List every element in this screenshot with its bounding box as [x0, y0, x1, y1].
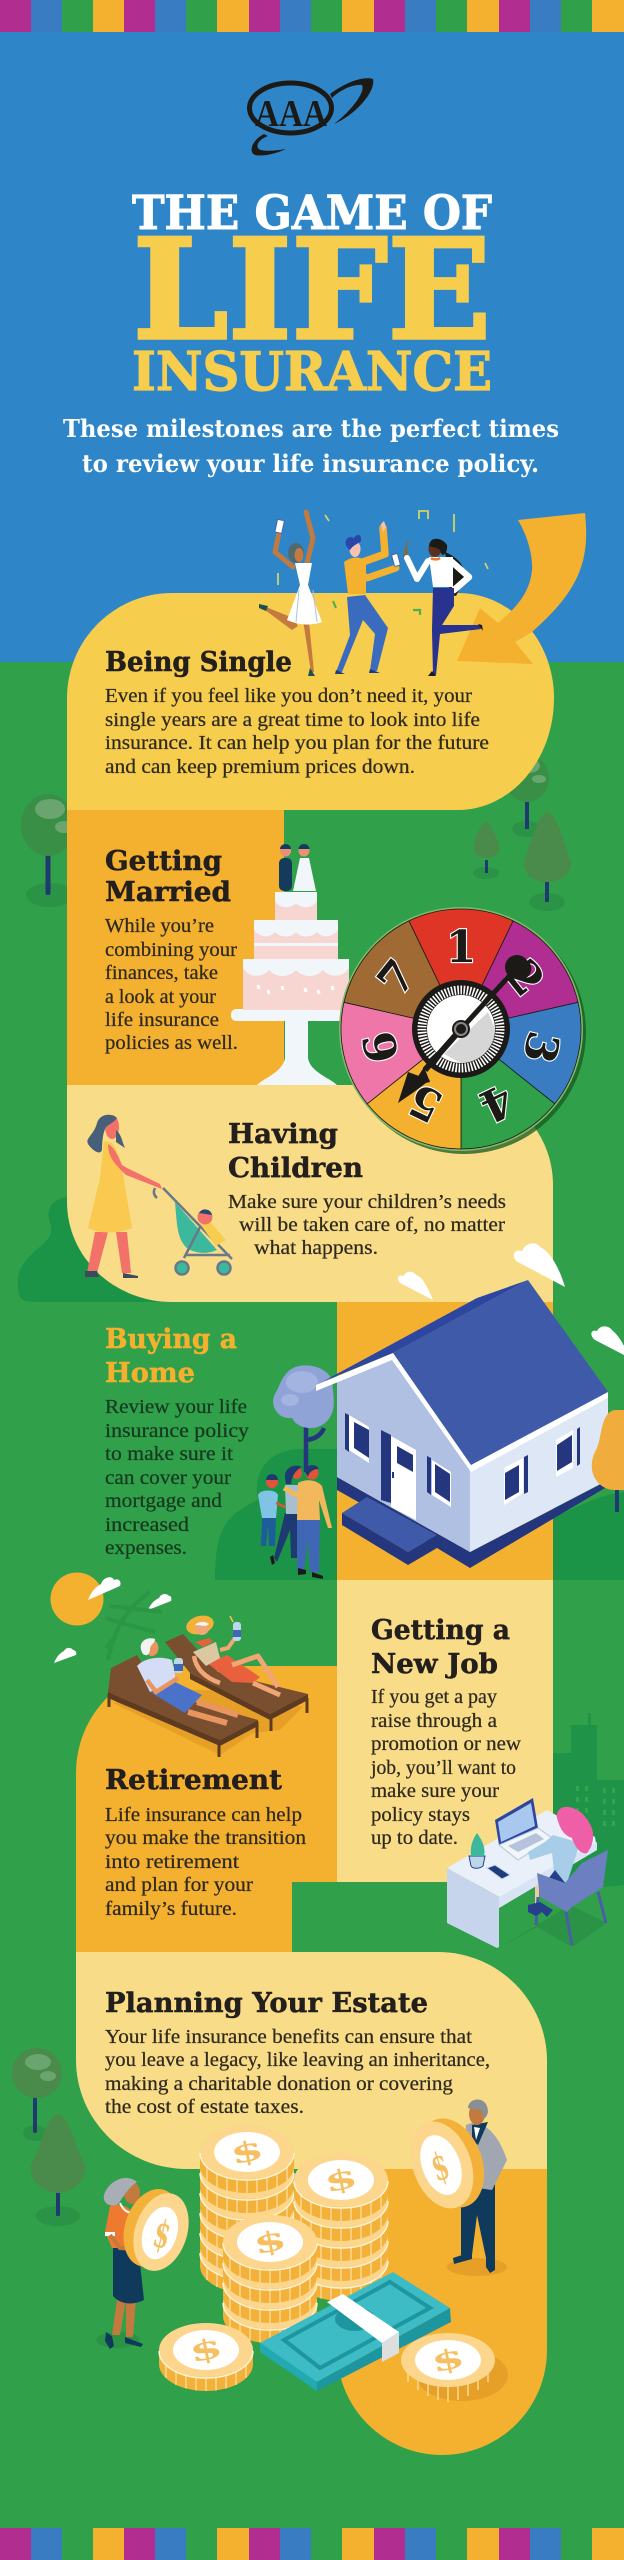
text: planning your estate: Your life insurance benefits can ensure that	[105, 2026, 472, 2048]
illustration: woman at desk	[447, 1798, 608, 1948]
illustration: city skyline	[553, 1713, 624, 1887]
illustration: spinner wheel: 6	[353, 1027, 410, 1068]
text: getting a new job: policy stays	[371, 1804, 470, 1826]
text: having children: Having	[228, 1118, 338, 1150]
illustration: loose coins	[159, 2323, 508, 2402]
text: getting married: finances, take	[105, 962, 218, 984]
illustration: coin stacks: $	[322, 2162, 361, 2199]
text: retirement: Life insurance can help	[105, 1804, 302, 1826]
text: buying a home: increased	[105, 1514, 189, 1536]
text: being single: insurance. It can help you plan for the future	[105, 732, 489, 754]
illustration: sun and clouds	[50, 1572, 171, 1663]
illustration: man holding coin: $	[426, 2144, 455, 2191]
buying a home hills and panel	[215, 1302, 624, 1580]
text: retirement: Retirement	[105, 1764, 282, 1796]
text: retirement: into retirement	[105, 1851, 239, 1873]
text: getting married: Getting	[105, 845, 222, 877]
text: being single: Being Single	[105, 646, 292, 678]
estate trees	[12, 2048, 85, 2226]
text: buying a home: can cover your	[105, 1467, 231, 1489]
text: buying a home: mortgage and	[105, 1490, 222, 1512]
panel: having children	[18, 1085, 553, 1302]
illustration: spinner wheel: 4	[471, 1073, 521, 1132]
panel: planning your estate	[76, 1952, 547, 2455]
text: getting a new job: New Job	[371, 1648, 498, 1680]
panel: retirement	[76, 1666, 337, 1952]
text: buying a home: Review your life	[105, 1396, 247, 1418]
text: buying a home	[105, 1323, 249, 1559]
text: getting married	[105, 845, 238, 1054]
text: getting married: life insurance	[105, 1009, 219, 1031]
title: LIFE	[133, 208, 491, 371]
text: being single: Even if you feel like you don’t need it, your	[105, 685, 472, 707]
text: retirement: family’s future.	[105, 1898, 237, 1920]
text: getting married: While you’re	[105, 915, 214, 937]
AAA logo: AAA	[255, 93, 327, 135]
text: planning your estate: the cost of estate taxes.	[105, 2096, 304, 2118]
text: getting a new job: promotion or new	[371, 1733, 522, 1755]
text: getting a new job: make sure your	[371, 1780, 499, 1802]
text: buying a home: Buying a	[105, 1323, 237, 1355]
AAA logo	[250, 78, 373, 156]
panel: being single	[67, 593, 554, 810]
text: having children	[228, 1118, 506, 1259]
illustration: loose coins: $	[429, 2342, 468, 2379]
text: having children: will be taken care of, no matter	[239, 1214, 505, 1236]
text: getting married: policies as well.	[105, 1032, 238, 1054]
text: buying a home: to make sure it	[105, 1443, 233, 1465]
clouds near house	[398, 1243, 624, 1355]
text: having children: Children	[228, 1152, 363, 1184]
text: getting married: a look at your	[105, 986, 216, 1008]
text: buying a home: expenses.	[105, 1537, 187, 1559]
illustration: spinner wheel: 2	[495, 950, 554, 1006]
illustration: loose coins: $	[187, 2332, 226, 2369]
illustration: coin stacks: $	[251, 2224, 290, 2261]
text: being single: and can keep premium prices down.	[105, 756, 415, 778]
subtitle: These milestones are the perfect times	[63, 414, 559, 443]
text: planning your estate	[105, 1987, 490, 2118]
text: getting a new job: job, you’ll want to	[370, 1757, 516, 1779]
illustration: sun loungers with couple	[108, 1613, 308, 1757]
text: buying a home: insurance policy	[105, 1420, 249, 1442]
text: getting a new job: raise through a	[371, 1710, 497, 1732]
illustration: woman holding coin	[96, 2178, 198, 2349]
text: getting a new job: If you get a pay	[371, 1686, 497, 1708]
illustration: coin stacks: $	[228, 2134, 267, 2171]
back lounger	[165, 1634, 308, 1714]
text: having children: Make sure your children’s needs	[228, 1191, 506, 1213]
illustration: spinner wheel: 7	[368, 950, 427, 1006]
subtitle: to review your life insurance policy.	[82, 449, 539, 478]
illustration: spinner wheel: 5	[401, 1073, 451, 1132]
arrow	[457, 513, 586, 664]
illustration: mother with stroller	[85, 1115, 232, 1278]
title: THE GAME OF	[132, 186, 492, 241]
top colour stripes	[0, 0, 624, 32]
illustration: spinner wheel	[339, 907, 586, 1154]
illustration: coin stacks	[200, 2125, 388, 2343]
text: buying a home: Home	[105, 1357, 195, 1389]
illustration: spinner wheel: 3	[512, 1027, 569, 1068]
text: retirement: you make the transition	[105, 1827, 306, 1849]
illustration: family	[258, 1465, 332, 1579]
illustration: woman holding coin: $	[149, 2212, 175, 2258]
text: having children: what happens.	[254, 1237, 378, 1259]
illustration: house	[316, 1280, 608, 1568]
text: getting a new job: Getting a	[371, 1614, 510, 1646]
text: retirement: and plan for your	[105, 1874, 253, 1896]
illustration: spinner wheel: 1	[446, 922, 476, 973]
illustration: stack of bills	[260, 2272, 451, 2391]
panel: getting a new job	[337, 1580, 553, 1882]
bottom colour stripes	[0, 2528, 624, 2560]
illustration: man holding coin	[399, 2099, 507, 2276]
segment 1	[409, 909, 513, 1029]
illustration: orange tree	[592, 1410, 624, 1512]
background trees	[21, 754, 571, 911]
front lounger	[108, 1655, 258, 1740]
text: retirement	[105, 1764, 306, 1920]
text: planning your estate: you leave a legacy, like leaving an inheritance,	[105, 2049, 490, 2071]
text: getting a new job: up to date.	[371, 1827, 458, 1849]
text: planning your estate: Planning Your Estate	[105, 1987, 428, 2019]
text: getting a new job	[370, 1614, 522, 1849]
title: INSURANCE	[132, 341, 492, 403]
text: being single: single years are a great time to look into life	[105, 709, 480, 731]
illustration: wedding cake	[231, 844, 351, 1085]
subtitle	[63, 414, 559, 478]
text: planning your estate: making a charitable donation or covering	[105, 2073, 453, 2095]
text: being single	[105, 646, 489, 778]
text: getting married: combining your	[105, 939, 237, 961]
illustration: three dancers	[259, 511, 488, 676]
illustration: blue tree	[273, 1365, 334, 1472]
text: getting married: Married	[105, 876, 231, 908]
panel: getting married	[67, 810, 284, 1085]
